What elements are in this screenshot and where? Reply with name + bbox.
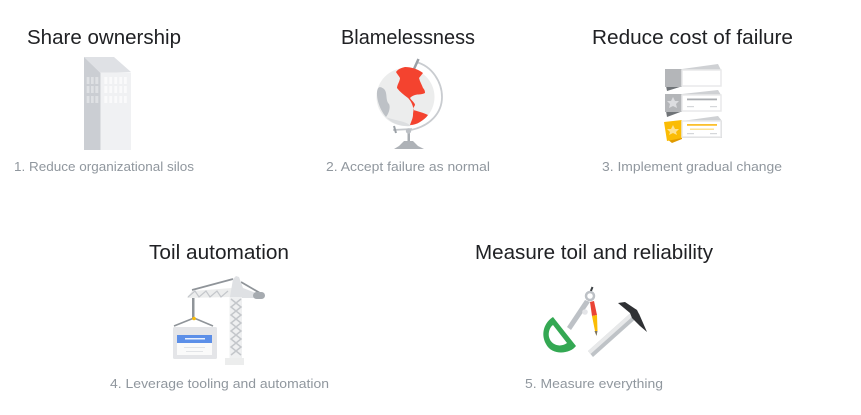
caption: implement gradual change: 3. Implement gradual change (602, 159, 782, 174)
heading: toil automation: Toil automation (149, 241, 289, 264)
heading: reduce cost of failure: Reduce cost of failure (592, 26, 793, 49)
ticket: grey top (665, 64, 721, 91)
compass (567, 287, 598, 336)
caption: measure everything: 5. Measure everything (525, 376, 663, 391)
heading: blamelessness: Blamelessness (341, 26, 475, 49)
protractor (543, 317, 576, 352)
ticket: yellow star (664, 116, 722, 143)
panel: blamelessness (326, 26, 490, 174)
icon: drafting tools (543, 287, 647, 357)
panel: measure toil and reliability (475, 241, 714, 391)
icon: globe (376, 59, 442, 149)
ticket: grey star (665, 90, 721, 117)
ruler (588, 302, 647, 357)
icon: tickets (664, 64, 722, 143)
caption: leverage tooling and automation: 4. Leverage tooling and automation (110, 376, 329, 391)
caption: accept failure as normal: 2. Accept failure as normal (326, 159, 490, 174)
panel: share ownership (14, 26, 195, 174)
caption: reduce organizational silos: 1. Reduce organizational silos (14, 159, 195, 174)
panel: reduce cost of failure (592, 26, 793, 174)
icon: crane (173, 276, 265, 365)
heading: share ownership: Share ownership (27, 26, 181, 49)
heading: measure toil and reliability: Measure toil and reliability (475, 241, 714, 264)
panel: toil automation (110, 241, 329, 391)
icon: building (84, 57, 131, 150)
